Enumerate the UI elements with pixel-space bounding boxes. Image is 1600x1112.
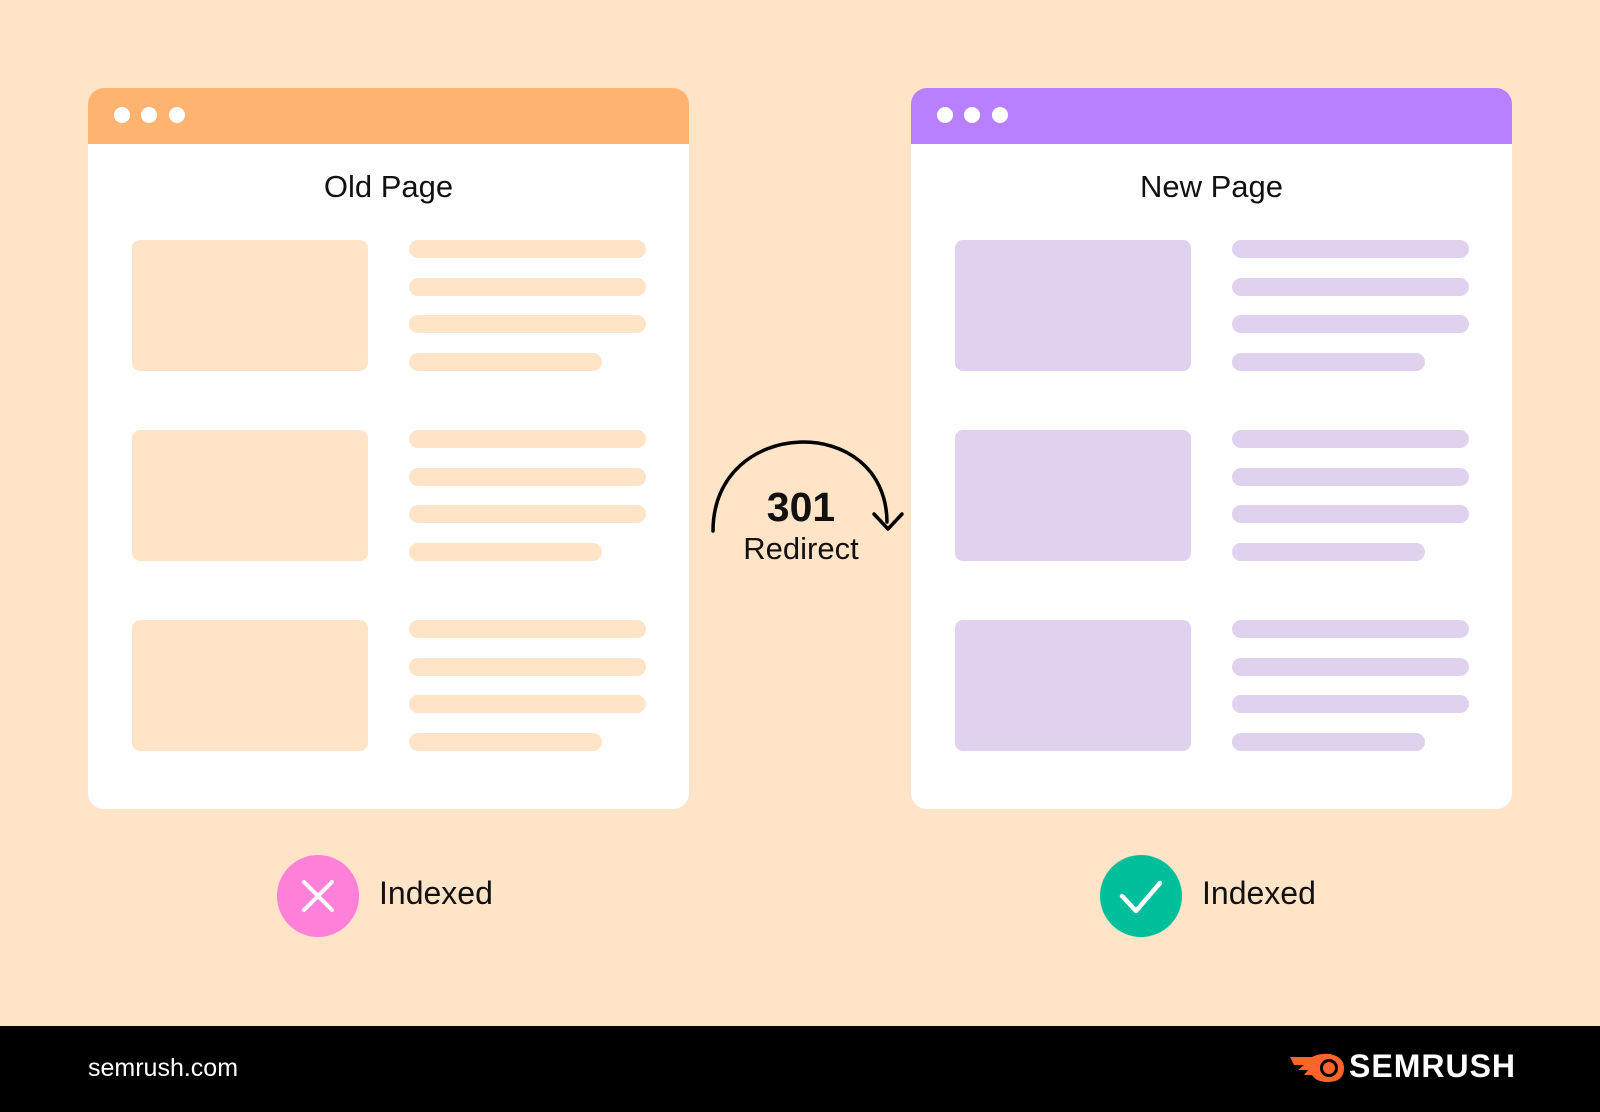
panel: new page window (911, 88, 1512, 809)
text: 301 Redirect: Redirect (743, 531, 859, 566)
header bar orange (88, 88, 689, 144)
text: 301 Redirect: 301 (767, 484, 835, 530)
content rows new (955, 240, 1469, 751)
text: 301 Redirect (743, 484, 859, 566)
status: new indexed: Indexed (1202, 875, 1316, 911)
arrow: 301 redirect arc (711, 440, 904, 533)
status: old not indexed: Indexed (379, 875, 493, 911)
header bar purple (911, 88, 1512, 144)
icon: pink x (277, 855, 359, 937)
logo: semrush: SEMRUSH (1349, 1048, 1516, 1084)
panel: old page window (88, 88, 689, 809)
status: new indexed (1100, 855, 1316, 937)
content rows old (132, 240, 646, 751)
icon: green check (1100, 855, 1182, 937)
footer text: semrush.com: semrush.com (88, 1054, 238, 1082)
heading: New Page: New Page (1140, 169, 1283, 204)
heading: Old Page: Old Page (324, 169, 453, 204)
footer bar (0, 1026, 1600, 1112)
status: old not indexed (277, 855, 493, 937)
